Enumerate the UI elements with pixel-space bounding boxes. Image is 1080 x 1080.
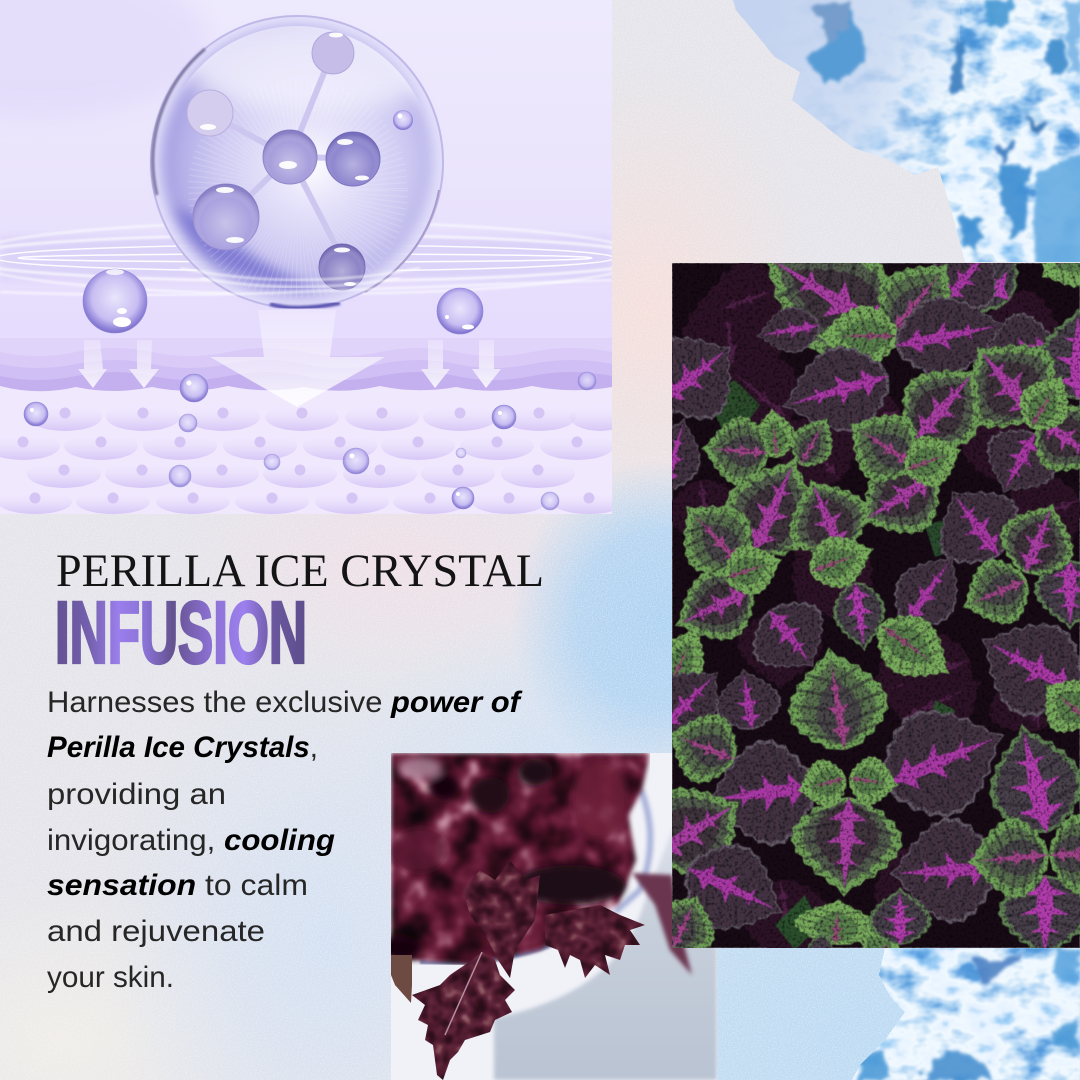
panel: skin penetration illustration	[0, 0, 650, 514]
dark background foliage	[662, 246, 1080, 976]
soft haze top left	[0, 0, 199, 107]
ice crystals bottom right	[850, 948, 1080, 1080]
left curled leaf	[391, 955, 412, 1003]
body text: invigorating, cooling	[47, 824, 335, 857]
right-middle leaves	[636, 595, 1080, 794]
right upper leaves	[972, 308, 1080, 494]
blurred leaf mass	[391, 753, 650, 965]
top centre leaf cluster	[766, 263, 1080, 375]
body text: Perilla Ice Crystals,	[47, 731, 318, 764]
molecule bonds	[230, 71, 338, 245]
sphere rim	[151, 16, 443, 308]
light cap at top of sphere	[186, 26, 418, 114]
hanging leaf	[632, 873, 692, 975]
lower centre leaf cluster	[699, 639, 1027, 900]
front leaf veins and shine	[445, 952, 482, 1035]
lower right leaf cluster	[886, 713, 1080, 960]
table edge line	[494, 1018, 496, 1080]
skin wave layers	[0, 348, 612, 392]
title: PERILLA ICE CRYSTAL: PERILLA ICE CRYSTAL	[56, 545, 544, 597]
dark hollows and highlights in the mass	[378, 757, 628, 960]
dark crescent lower left	[175, 205, 320, 290]
sharp leaf: front	[412, 952, 515, 1080]
middle leaf cluster	[849, 368, 982, 535]
molecule atoms	[187, 32, 380, 290]
ripple rings	[0, 222, 650, 294]
body text: Harnesses the exclusive power of	[47, 686, 523, 719]
upper-left leaves	[672, 306, 890, 490]
blue ice patches	[860, 950, 1080, 1080]
photo: coleus perilla leaves	[672, 263, 1080, 948]
photo: bowl of purple perilla leaves	[378, 753, 717, 1080]
body text: and rejuvenate	[47, 915, 265, 948]
sharp leaf: right	[545, 905, 645, 978]
ice crystals top right	[733, 0, 1080, 262]
small bubble by sphere	[393, 110, 413, 130]
body text: providing an	[47, 778, 226, 811]
body text: sensation to calm	[47, 869, 308, 902]
skin cell layers	[0, 386, 630, 514]
bottom left leaves	[629, 760, 932, 986]
pale lilac ice facets	[733, 0, 960, 166]
molecule sphere	[150, 15, 445, 309]
floating bubbles	[24, 269, 596, 510]
rings passing over sphere	[0, 268, 612, 295]
bowl rim	[615, 790, 650, 912]
saturated blue ice patches	[810, 0, 1080, 275]
arrows pointing into skin	[78, 310, 501, 407]
sharp leaf: middle	[463, 860, 540, 978]
table surface	[492, 830, 717, 1080]
body text	[47, 686, 523, 994]
lower-middle leaves	[674, 458, 1080, 678]
title: INFUSION: INFUSION	[55, 584, 307, 682]
body text: your skin.	[47, 961, 174, 994]
atom highlights	[200, 32, 369, 286]
sunburst rays	[243, 135, 353, 245]
sphere inner glow	[161, 26, 433, 298]
